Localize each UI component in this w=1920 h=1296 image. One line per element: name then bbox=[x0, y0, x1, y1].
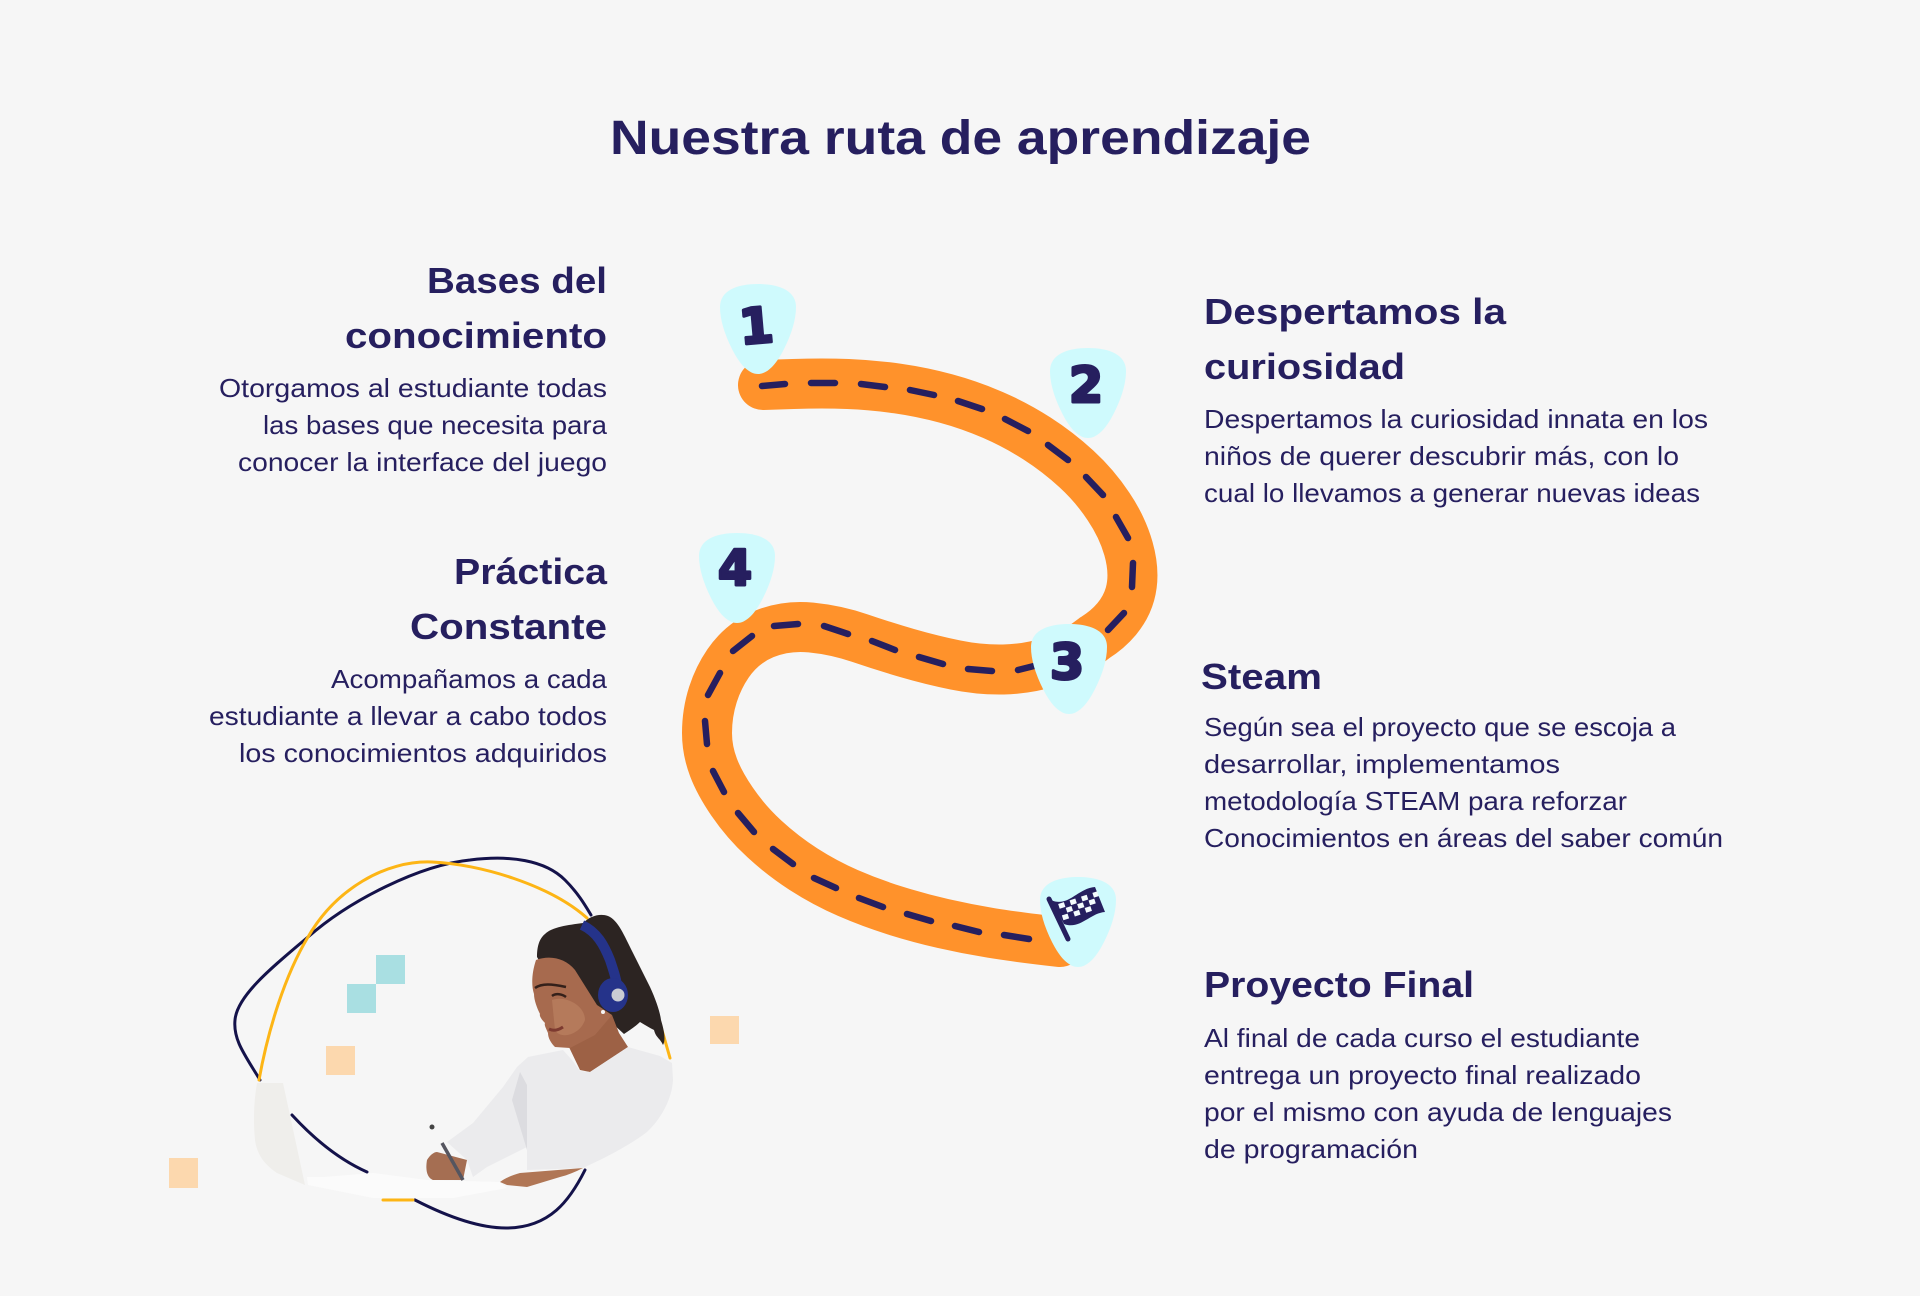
headphones bbox=[582, 925, 628, 1012]
pin 4 bbox=[699, 533, 775, 623]
text block: step 1 description: conocer la interface del juego bbox=[238, 447, 607, 477]
text block: step 5 description: entrega un proyecto final realizado bbox=[1204, 1060, 1641, 1090]
blob outlines bbox=[235, 858, 670, 1228]
text block: step 3 description bbox=[1204, 712, 1723, 853]
shirt bbox=[447, 1047, 673, 1177]
text block: step 3 description: metodología STEAM para reforzar bbox=[1204, 786, 1627, 816]
text block: step 3 description: Según sea el proyecto que se escoja a bbox=[1204, 712, 1677, 742]
pin 1: 1 bbox=[737, 297, 776, 356]
panel: step 3 Steam bbox=[1201, 656, 1723, 853]
shirt shadow fold bbox=[512, 1072, 527, 1150]
text block: step 5 description: por el mismo con ayuda de lenguajes bbox=[1204, 1097, 1672, 1127]
heading: Proyecto Final: Proyecto Final bbox=[1204, 964, 1474, 1005]
pin 3: 3 bbox=[1050, 634, 1084, 691]
text block: step 1 description: Otorgamos al estudiante todas bbox=[219, 373, 607, 403]
earring bbox=[601, 1010, 605, 1014]
heading: Práctica Constante: Constante bbox=[410, 606, 607, 647]
text block: step 4 description bbox=[209, 664, 608, 768]
mouth bbox=[549, 1027, 563, 1030]
text block: step 3 description: desarrollar, implementamos bbox=[1204, 749, 1560, 779]
title: Nuestra ruta de aprendizaje bbox=[610, 112, 1311, 165]
heading: Despertamos la curiosidad: Despertamos la bbox=[1204, 291, 1507, 332]
icon: checkered flag bbox=[1049, 887, 1105, 939]
text block: step 2 description: Despertamos la curiosidad innata en los bbox=[1204, 404, 1708, 434]
cheek highlight bbox=[552, 999, 585, 1035]
heading: Bases del conocimiento: conocimiento bbox=[345, 315, 607, 356]
eye and brow bbox=[535, 984, 566, 997]
text block: step 2 description bbox=[1204, 404, 1708, 508]
heading: Práctica Constante bbox=[410, 551, 608, 647]
text block: step 4 description: los conocimientos adquiridos bbox=[239, 738, 607, 768]
heading: Bases del conocimiento bbox=[345, 260, 607, 356]
text block: step 5 description bbox=[1204, 1023, 1672, 1164]
heading: Despertamos la curiosidad bbox=[1204, 291, 1507, 387]
laptop bbox=[254, 1083, 305, 1185]
heading: Despertamos la curiosidad: curiosidad bbox=[1204, 346, 1405, 387]
pin: finish flag bbox=[1040, 877, 1116, 967]
paper and keyboard bbox=[307, 1173, 507, 1198]
text block: step 5 description: Al final de cada curso el estudiante bbox=[1204, 1023, 1640, 1053]
panel: step 5 Proyecto Final bbox=[1204, 964, 1672, 1164]
heading: Bases del conocimiento: Bases del bbox=[427, 260, 607, 301]
road centre dashes bbox=[705, 383, 1133, 939]
pin 2: 2 bbox=[1069, 357, 1103, 414]
text block: step 5 description: de programación bbox=[1204, 1134, 1418, 1164]
pin 3 bbox=[1031, 624, 1107, 714]
chart: winding orange road with dashes and pins bbox=[699, 284, 1133, 967]
panel: step 1 Bases del conocimiento bbox=[219, 260, 608, 477]
hair bbox=[537, 915, 664, 1045]
writing hand and pen bbox=[426, 1124, 467, 1180]
illustration: student with headphones inside outlined blobs bbox=[235, 858, 673, 1228]
pin 1 bbox=[720, 284, 796, 374]
pin 4: 4 bbox=[718, 540, 752, 597]
panel: step 4 Práctica Constante bbox=[209, 551, 608, 768]
heading: Steam: Steam bbox=[1201, 656, 1322, 697]
decorative squares bbox=[169, 955, 739, 1188]
heading: Práctica Constante: Práctica bbox=[454, 551, 608, 592]
neck bbox=[568, 1015, 628, 1072]
pin 2 bbox=[1050, 348, 1126, 438]
resting hand bbox=[500, 1168, 583, 1187]
face bbox=[532, 958, 612, 1048]
text block: step 4 description: estudiante a llevar a cabo todos bbox=[209, 701, 607, 731]
text block: step 3 description: Conocimientos en áreas del saber común bbox=[1204, 823, 1723, 853]
text block: step 2 description: cual lo llevamos a generar nuevas ideas bbox=[1204, 478, 1700, 508]
panel: step 2 Despertamos la curiosidad bbox=[1204, 291, 1708, 508]
text block: step 2 description: niños de querer descubrir más, con lo bbox=[1204, 441, 1679, 471]
text block: step 4 description: Acompañamos a cada bbox=[331, 664, 608, 694]
road bbox=[707, 384, 1132, 942]
text block: step 1 description: las bases que necesita para bbox=[263, 410, 608, 440]
text block: step 1 description bbox=[219, 373, 608, 477]
